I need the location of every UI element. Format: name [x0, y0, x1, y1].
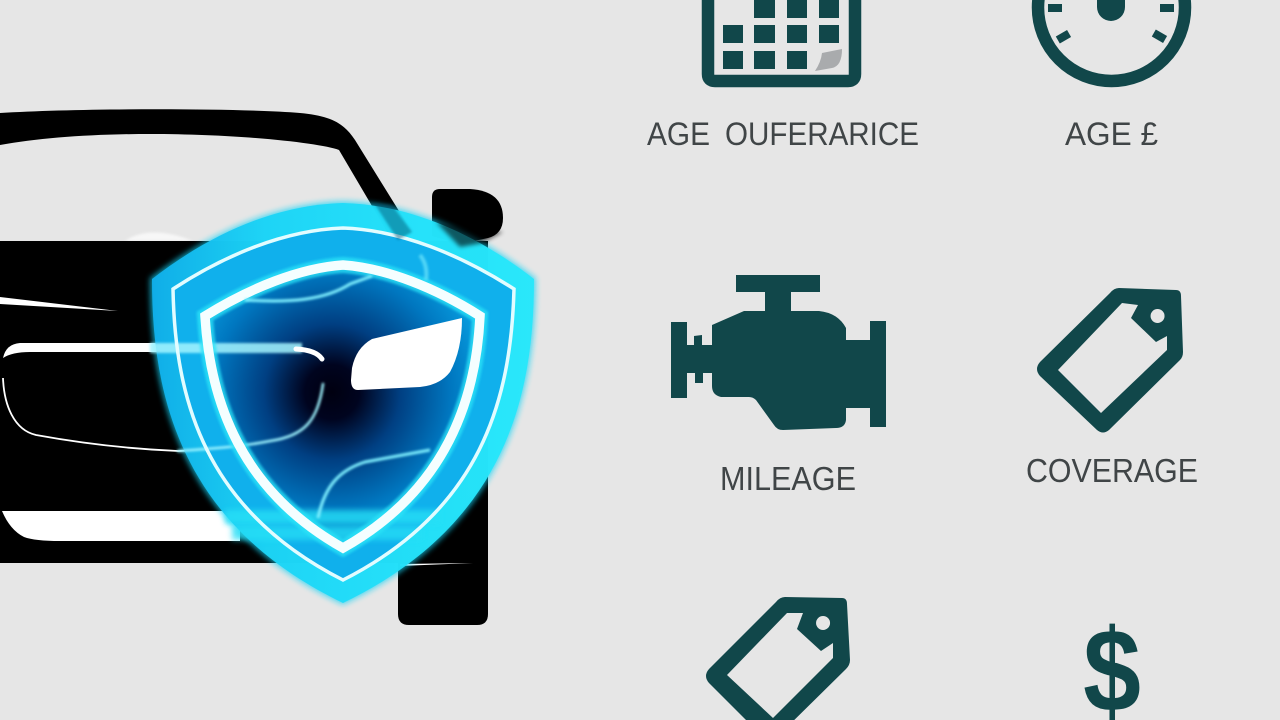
- headlight: [351, 318, 462, 390]
- car wheel: [398, 540, 488, 625]
- label: age ourerarice: AGE: [647, 116, 710, 152]
- shield swoosh lines: [245, 255, 430, 518]
- icon: calendar: [708, 0, 855, 81]
- shield outer band: [152, 203, 534, 603]
- shield thin outer ring: [173, 228, 514, 580]
- body crease: [0, 297, 118, 311]
- shield glow: [150, 201, 536, 605]
- label: age ourerarice: OUFERARICE: [725, 116, 919, 152]
- gauge needle: [1097, 0, 1125, 21]
- lower bumper line: [400, 563, 473, 566]
- pillar showing through shield: [374, 203, 412, 240]
- grille outline: [3, 343, 323, 451]
- icon: protective shield: [150, 201, 536, 605]
- label: age ourerarice: [647, 116, 919, 152]
- grille bands through shield: [150, 343, 440, 540]
- icon: price tag: [1037, 288, 1183, 432]
- icon: engine: [671, 275, 886, 430]
- car roof and windshield pillar: [0, 109, 412, 240]
- icon: speedometer gauge: [1038, 0, 1185, 81]
- label: age pound: AGE £: [1065, 116, 1158, 152]
- hood highlight: [125, 232, 193, 241]
- lower air intake: [2, 511, 240, 541]
- icon: price tag lower: [706, 597, 850, 720]
- label: coverage: COVERAGE: [1026, 452, 1198, 489]
- shield middle band: [173, 228, 514, 580]
- shield inner core: [205, 265, 480, 548]
- car side mirror: [432, 189, 503, 244]
- car body: [0, 241, 488, 563]
- label: mileage: MILEAGE: [720, 460, 856, 497]
- illustration: car front: [0, 109, 503, 625]
- calendar page fold: [815, 49, 842, 71]
- shield thick inner ring: [205, 265, 480, 548]
- gauge ticks: [1048, 4, 1174, 43]
- calendar day squares: [723, 0, 839, 69]
- mirror showing through shield: [436, 222, 503, 247]
